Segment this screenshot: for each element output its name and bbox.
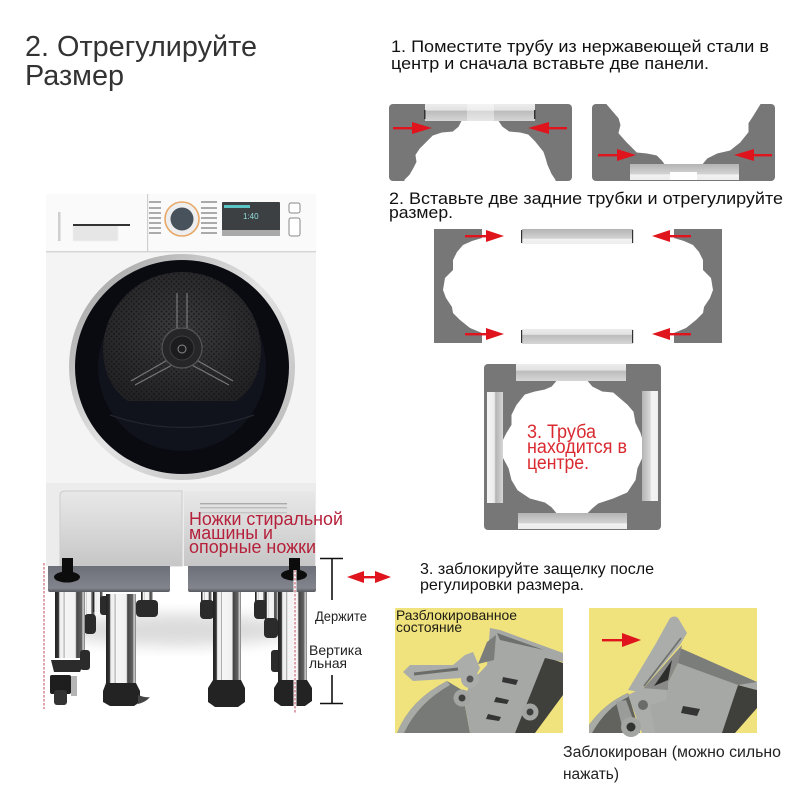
red label: washer feet: машины и xyxy=(189,523,273,543)
step 1 instruction xyxy=(391,37,769,73)
step 1 instruction: 1. Поместите трубу из нержавеющей стали в xyxy=(391,37,769,56)
panel: assembled frame xyxy=(484,364,661,530)
machine body xyxy=(46,194,316,566)
title xyxy=(25,31,257,92)
right tube xyxy=(642,391,658,501)
latch body xyxy=(464,628,563,733)
title: Размер xyxy=(25,60,124,92)
label: Разблокированное xyxy=(396,607,517,623)
control panel xyxy=(46,194,316,252)
title: 2. Отрегулируйте xyxy=(25,31,257,63)
step 1 instruction: центр и сначала вставьте две панели. xyxy=(391,54,709,73)
arrow: right into tube xyxy=(528,122,567,134)
arrow xyxy=(602,633,641,647)
frame right side xyxy=(674,229,722,343)
lower panel xyxy=(46,483,316,566)
step 2 instruction: размер. xyxy=(389,203,453,222)
control panel: 1:40 xyxy=(243,212,259,221)
arrow: right into tube xyxy=(734,149,772,161)
top tube xyxy=(516,364,626,381)
step 3 instruction: регулировки размера. xyxy=(420,577,584,594)
photo: locked latch xyxy=(589,608,757,737)
left tube xyxy=(487,392,503,503)
label: состояние xyxy=(396,619,462,635)
washer foot marker right xyxy=(281,558,307,580)
latch body xyxy=(636,648,757,733)
locked caption: нажать) xyxy=(563,766,619,783)
locked caption: Заблокирован (можно сильно xyxy=(563,744,781,761)
step 3 instruction: 3. заблокируйте защелку после xyxy=(420,561,654,578)
front legs xyxy=(50,592,312,707)
drawer handle xyxy=(73,225,118,241)
power and start buttons xyxy=(289,203,300,213)
panel: separated four-corner frame xyxy=(434,229,722,344)
stand base left xyxy=(48,566,170,592)
curved housing xyxy=(397,681,470,733)
display xyxy=(222,202,280,236)
label: vertical: Вертика xyxy=(309,642,362,658)
label: keep: Держите xyxy=(315,608,367,624)
red label: washer feet xyxy=(189,509,343,557)
ring bosses xyxy=(461,670,479,688)
step 3 instruction xyxy=(420,561,654,594)
top tube xyxy=(521,229,633,244)
gap behind lever xyxy=(640,645,682,692)
photo: unlocked latch xyxy=(395,607,563,733)
back legs xyxy=(83,592,281,672)
bottom tube xyxy=(518,513,627,529)
frame centre opening xyxy=(502,381,643,513)
frame left side xyxy=(434,229,482,343)
curved housing xyxy=(589,693,640,733)
alignment dashes xyxy=(44,563,295,714)
dial xyxy=(165,202,199,236)
slot xyxy=(681,706,700,716)
slots xyxy=(486,677,518,721)
step 2 instruction xyxy=(389,189,783,222)
floor shadow xyxy=(65,614,295,646)
arrow: double-headed red xyxy=(347,571,391,583)
bottom tube xyxy=(521,329,633,344)
arrow: left into tube xyxy=(598,149,636,161)
hinge plate xyxy=(628,688,668,733)
drum xyxy=(103,272,261,401)
height dimension bracket xyxy=(320,558,343,704)
centre label: находится в xyxy=(527,437,627,458)
right leg xyxy=(274,592,312,706)
centre label xyxy=(527,422,627,474)
centre label: 3. Труба xyxy=(527,422,596,443)
label: vertical xyxy=(309,642,362,671)
dark opening xyxy=(720,685,757,733)
centre label: центре. xyxy=(527,453,589,474)
left leg with caster xyxy=(50,592,90,705)
washer foot marker left xyxy=(54,558,80,582)
panel: bottom tube frame half xyxy=(592,103,775,181)
dark opening xyxy=(515,655,563,733)
stand base right xyxy=(188,566,316,592)
lower boss xyxy=(616,700,634,726)
arrow: left into tube xyxy=(393,122,432,134)
programme list xyxy=(149,201,217,234)
label: vertical: льная xyxy=(309,655,347,671)
red label: washer feet: опорные ножки xyxy=(189,537,316,557)
panel: top tube frame half xyxy=(389,104,572,182)
arrows inward and outward xyxy=(465,230,691,340)
red label: washer feet: Ножки стиральной xyxy=(189,509,343,529)
label xyxy=(396,607,517,635)
lever xyxy=(628,616,687,692)
lever xyxy=(403,652,480,683)
door xyxy=(69,254,295,480)
centre-left leg xyxy=(103,594,150,706)
step 2 instruction: 2. Вставьте две задние трубки и отрегулируйте xyxy=(389,189,783,208)
locked caption xyxy=(563,744,781,783)
centre-right leg xyxy=(208,592,245,707)
washing machine xyxy=(46,194,316,566)
